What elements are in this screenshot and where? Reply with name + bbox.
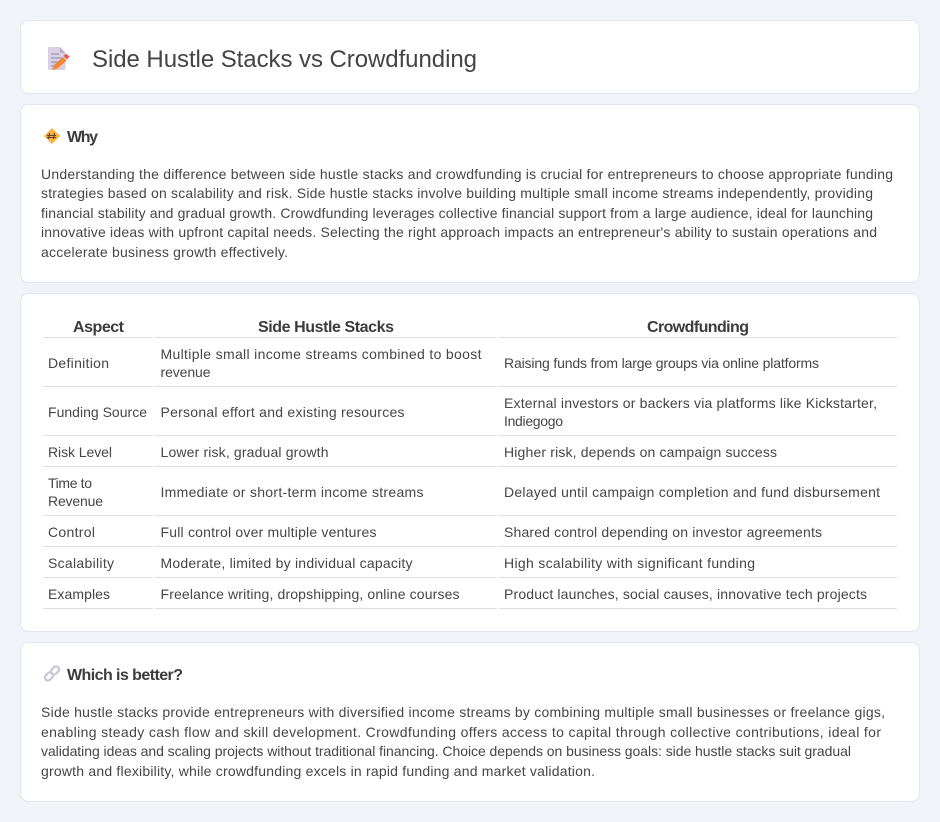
text block: why: innovative ideas with upfront capital needs. Selecting the right approach impacts an entrepreneur's ability to sustain operations and	[41, 224, 877, 240]
text block: why: strategies based on scalability and risk. Side hustle stacks involve building multiple small income streams independently, providing	[41, 185, 873, 201]
text block: which is better	[41, 704, 885, 779]
row: examples	[43, 586, 897, 609]
text block: why: Understanding the difference between side hustle stacks and crowdfunding is crucial for entrepreneurs to choose appropriate funding	[41, 166, 893, 182]
row: funding source: Indiegogo	[504, 413, 563, 429]
icon: document with pencil	[48, 47, 70, 70]
text block: which is better: Side hustle stacks provide entrepreneurs with diversified income streams by combining multiple small businesses or freelance gigs,	[41, 704, 885, 720]
row: funding source	[43, 395, 897, 436]
row: scalability	[43, 555, 897, 578]
row: time to revenue: Immediate or short-term income streams	[160, 484, 424, 500]
row: examples: Product launches, social causes, innovative tech projects	[504, 586, 867, 602]
row: definition: Multiple small income streams combined to boost	[160, 346, 482, 362]
row: time to revenue: Time to	[48, 475, 92, 491]
row: time to revenue: Delayed until campaign completion and fund disbursement	[504, 484, 880, 500]
row: time to revenue	[43, 475, 897, 516]
row: definition: revenue	[160, 364, 211, 380]
icon: chain link	[44, 665, 60, 682]
table header: Side Hustle Stacks	[258, 319, 394, 336]
row: examples: Freelance writing, dropshipping, online courses	[160, 586, 460, 602]
row: definition	[43, 346, 897, 387]
title: Side Hustle Stacks vs Crowdfunding	[92, 46, 477, 73]
panel: which is better	[20, 642, 920, 802]
text block: which is better: enabling steady cash flow and skill development. Crowdfunding offers access to capital through collective contributions, ideal for	[41, 724, 881, 740]
row: funding source: Funding Source	[48, 404, 147, 420]
row: risk level: Lower risk, gradual growth	[160, 444, 328, 460]
icon: warning diamond	[44, 128, 60, 144]
text block: why: accelerate business growth effectively.	[41, 244, 288, 260]
row: definition: Raising funds from large groups via online platforms	[504, 355, 819, 371]
heading: which is better: Which is better?	[67, 667, 183, 684]
row: scalability: High scalability with significant funding	[504, 555, 755, 571]
panel: comparison table	[20, 294, 920, 632]
row: control: Shared control depending on investor agreements	[504, 524, 822, 540]
text block: which is better: growth and flexibility, while crowdfunding excels in rapid funding and market validation.	[41, 763, 595, 779]
row: examples: Examples	[48, 586, 110, 602]
row: scalability: Moderate, limited by individual capacity	[160, 555, 412, 571]
table header	[43, 319, 897, 338]
row: risk level: Higher risk, depends on campaign success	[504, 444, 777, 460]
row: control	[43, 524, 897, 547]
row: control: Control	[48, 524, 95, 540]
row: risk level: Risk Level	[48, 444, 112, 460]
row: scalability: Scalability	[48, 555, 114, 571]
table header: Crowdfunding	[647, 319, 749, 336]
heading: why: Why	[67, 129, 98, 146]
text block: why	[41, 166, 893, 260]
row: time to revenue: Revenue	[48, 493, 103, 509]
text block: which is better: validating ideas and scaling projects without traditional financing. Choice depends on business goals: side hustle stacks suit gradual	[41, 743, 851, 759]
row: definition: Definition	[48, 355, 109, 371]
table header: Aspect	[73, 319, 125, 336]
row: funding source: External investors or backers via platforms like Kickstarter,	[504, 395, 877, 411]
row: funding source: Personal effort and existing resources	[160, 404, 404, 420]
text block: why: financial stability and gradual growth. Crowdfunding leverages collective financial support from a large audience, ideal for launching	[41, 205, 873, 221]
row: risk level	[43, 444, 897, 467]
panel: why	[20, 104, 920, 282]
panel: header	[20, 20, 920, 94]
row: control: Full control over multiple ventures	[160, 524, 376, 540]
